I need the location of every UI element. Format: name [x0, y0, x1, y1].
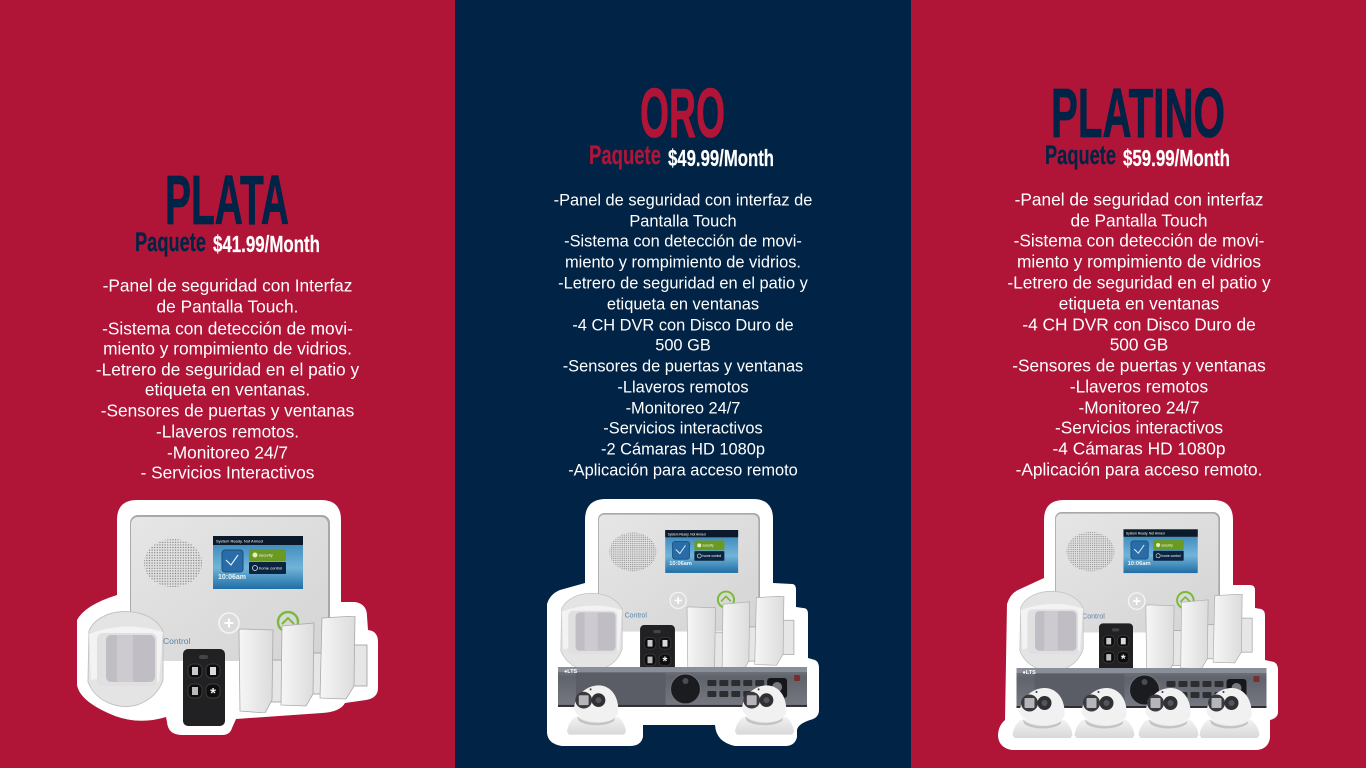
feature list: plata — [96, 276, 359, 483]
feature list: plata: -Monitoreo 24/7 — [167, 443, 288, 463]
product image: plata kit — [77, 500, 378, 735]
feature list: platino — [1007, 190, 1271, 480]
feature list: plata: -Llaveros remotos. — [156, 422, 299, 442]
feature list: plata: miento y rompimiento de vidrios. — [103, 339, 352, 359]
feature list: platino: -Monitoreo 24/7 — [1078, 398, 1200, 418]
feature list: oro: -Servicios interactivos — [603, 420, 763, 438]
feature list: platino: miento y rompimiento de vidrios — [1017, 252, 1261, 272]
feature list: oro: -Sensores de puertas y ventanas — [563, 358, 803, 376]
price line: platino: $59.99/Month — [1123, 145, 1230, 171]
feature list: oro: -2 Cámaras HD 1080p — [601, 441, 765, 459]
feature list: plata: de Pantalla Touch. — [157, 297, 298, 317]
feature list: plata: -Sensores de puertas y ventanas — [101, 401, 355, 421]
feature list: platino: -Letrero de seguridad en el patio y — [1007, 273, 1271, 293]
feature list: platino: -Aplicación para acceso remoto. — [1016, 460, 1262, 480]
feature list: oro — [554, 192, 812, 480]
price line: plata — [135, 227, 320, 257]
panel: oro — [455, 0, 911, 768]
product image: oro kit — [547, 499, 819, 746]
heading: ORO: ORO — [640, 74, 725, 152]
price line: plata: Paquete — [135, 227, 206, 257]
product image: platino kit — [998, 500, 1278, 750]
feature list: platino: -4 Cámaras HD 1080p — [1053, 439, 1225, 459]
feature list: oro: -Panel de seguridad con interfaz de — [554, 192, 812, 210]
feature list: platino: -Panel de seguridad con interfaz — [1015, 190, 1263, 210]
feature list: platino: de Pantalla Touch — [1070, 211, 1208, 231]
feature list: oro: -4 CH DVR con Disco Duro de — [572, 317, 794, 335]
feature list: plata: etiqueta en ventanas. — [145, 380, 310, 400]
price line: oro: $49.99/Month — [668, 145, 774, 171]
price line: oro: Paquete — [589, 140, 661, 170]
heading: PLATINO: PLATINO — [1051, 74, 1225, 152]
feature list: platino: -Sensores de puertas y ventanas — [1012, 356, 1266, 376]
feature list: oro: 500 GB — [655, 337, 711, 355]
feature list: platino: 500 GB — [1110, 335, 1168, 355]
feature list: oro: Pantalla Touch — [629, 213, 737, 231]
price line: platino: Paquete — [1045, 140, 1116, 170]
feature list: plata: -Panel de seguridad con Interfaz — [103, 276, 352, 296]
feature list: oro: -Sistema con detección de movi- — [564, 233, 802, 251]
feature list: platino: etiqueta en ventanas — [1059, 294, 1220, 314]
price line: oro — [589, 140, 774, 171]
price line: plata: $41.99/Month — [213, 231, 320, 257]
feature list: plata: -Sistema con detección de movi- — [102, 319, 353, 339]
feature list: oro: -Letrero de seguridad en el patio y — [558, 275, 809, 293]
panel: platino — [911, 0, 1366, 768]
feature list: platino: -Llaveros remotos — [1070, 377, 1209, 397]
feature list: oro: etiqueta en ventanas — [607, 296, 759, 314]
feature list: platino: -Servicios interactivos — [1055, 418, 1223, 438]
heading: PLATA: PLATA — [165, 161, 289, 239]
feature list: oro: -Aplicación para acceso remoto — [568, 462, 798, 480]
feature list: oro: -Monitoreo 24/7 — [626, 400, 740, 418]
feature list: platino: -4 CH DVR con Disco Duro de — [1022, 315, 1256, 335]
feature list: plata: - Servicios Interactivos — [141, 463, 315, 483]
feature list: plata: -Letrero de seguridad en el patio y — [96, 360, 359, 380]
feature list: oro: miento y rompimiento de vidrios. — [565, 254, 801, 272]
panel: plata — [0, 0, 455, 768]
feature list: platino: -Sistema con detección de movi- — [1014, 231, 1264, 251]
price line: platino — [1045, 140, 1230, 171]
feature list: oro: -Llaveros remotos — [617, 379, 749, 397]
